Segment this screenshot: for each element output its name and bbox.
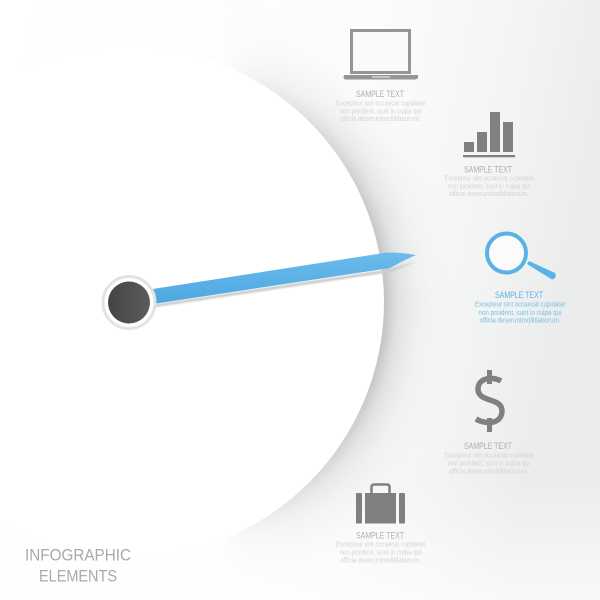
hub: [103, 276, 155, 328]
hub ring: [103, 276, 155, 328]
label: SAMPLE TEXT: [495, 290, 543, 301]
item: briefcase: non proident, sunt in culpa qui: [340, 550, 422, 556]
item: laptop: non proident, sunt in culpa qui: [340, 108, 422, 116]
item: briefcase: officia deseruntmollitlaborum.: [340, 558, 421, 564]
description: Excepteur sint occaecat cupidatat: [444, 176, 534, 182]
title: ELEMENTS: [39, 566, 117, 586]
item: dollar: non proident, sunt in culpa qui: [448, 460, 530, 468]
title: [25, 546, 131, 586]
item: bar chart: [444, 112, 534, 198]
icon: bar chart: [463, 112, 515, 157]
item: search (highlighted): [475, 234, 565, 324]
description: Excepteur sint occaecat cupidatat: [336, 100, 425, 108]
label: SAMPLE TEXT: [464, 164, 512, 176]
item: laptop: [336, 30, 425, 123]
description: Excepteur sint occaecat cupidatat: [336, 542, 425, 548]
label: SAMPLE TEXT: [464, 441, 512, 452]
icon: laptop: [344, 30, 418, 80]
description: Excepteur sint occaecat cupidatat: [444, 452, 534, 460]
description: Excepteur sint occaecat cupidatat: [475, 302, 565, 308]
circle shadow: [247, 72, 416, 532]
hub center: [108, 282, 150, 324]
item: dollar: [444, 370, 534, 476]
item: laptop: officia deseruntmollitlaborum.: [340, 116, 421, 123]
needle body: [140, 252, 416, 306]
item: briefcase: [336, 484, 425, 564]
label: SAMPLE TEXT: [356, 530, 404, 542]
needle: [140, 252, 417, 308]
icon: dollar sign: [476, 370, 502, 432]
item: bar chart: non proident, sunt in culpa qui: [448, 184, 530, 190]
needle shadow: [150, 261, 417, 308]
label: SAMPLE TEXT: [356, 89, 404, 100]
icon: magnifier: [487, 234, 556, 280]
white circle: [0, 47, 384, 557]
item: bar chart: officia deseruntmollitlaborum.: [449, 191, 529, 198]
icon: briefcase: [356, 484, 405, 524]
item: dollar: officia deseruntmollitlaborum.: [449, 468, 529, 476]
item: search (highlighted): non proident, sunt in culpa qui: [478, 310, 562, 317]
item: search (highlighted): officia deseruntmollitlaborum.: [480, 318, 561, 324]
title: INFOGRAPHIC: [25, 546, 131, 564]
